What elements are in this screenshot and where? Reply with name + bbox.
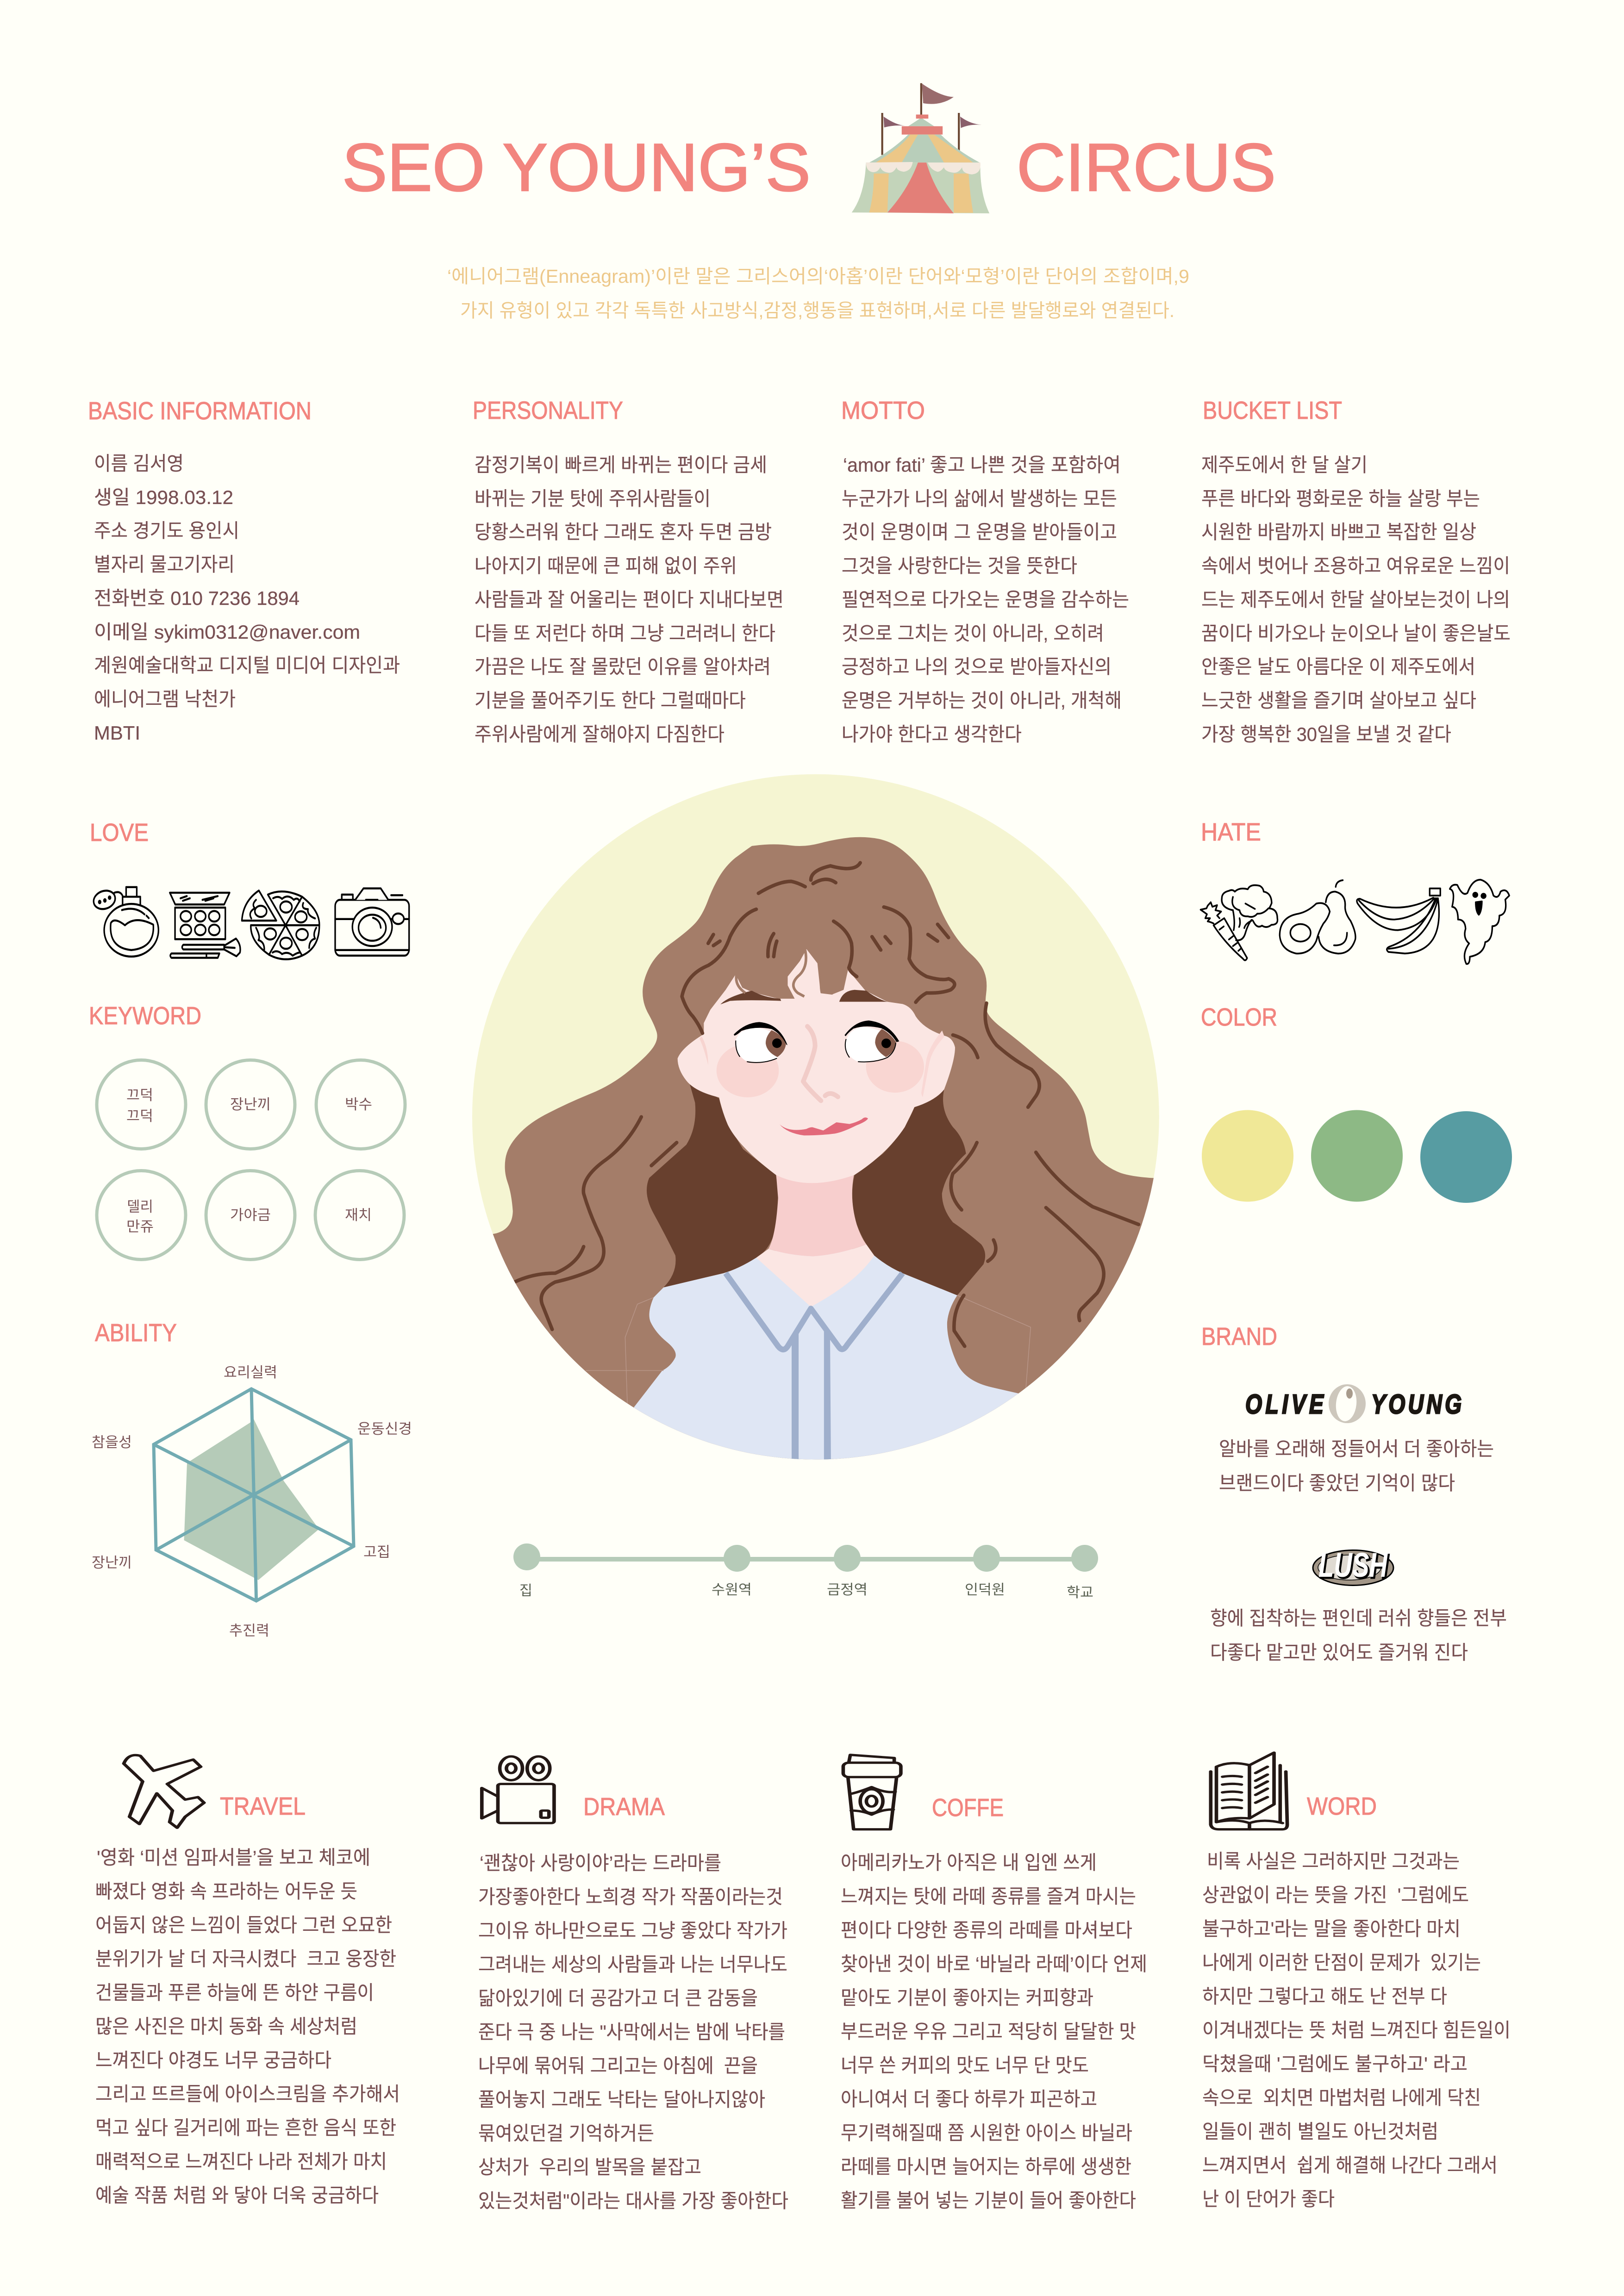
mouth: [780, 1118, 868, 1135]
text block: 라떼를 마시면 늘어지는 하루에 생생한: [841, 2156, 1131, 2178]
keyword circle: 만쥬: [126, 1219, 154, 1235]
text block: 드는 제주도에서 한달 살아보는것이 나의: [1201, 589, 1510, 610]
panel: ability: [92, 1319, 412, 1639]
keyword circle: 가야금: [230, 1207, 271, 1223]
color swatch: [1311, 1110, 1403, 1201]
text block: 그이유 하나만으로도 그냥 좋았다 작가가: [478, 1920, 787, 1941]
text block: 이메일 sykim0312@naver.com: [94, 621, 360, 643]
text block: [95, 1847, 400, 2206]
radar chart: 요리실력: [224, 1364, 277, 1381]
fringe shadows: [720, 990, 887, 1004]
text block: 찾아낸 것이 바로 ‘바닐라 라떼’이다 언제: [841, 1953, 1147, 1975]
radar chart: [92, 1364, 412, 1639]
title: SEO YOUNG’S: [342, 130, 811, 205]
heading: LOVE: [90, 819, 149, 846]
keyword circle: [315, 1171, 404, 1260]
hair strands: [736, 950, 833, 996]
title: CIRCUS: [1017, 130, 1276, 205]
text block: '영화 ‘미션 임파서블’을 보고 체코에: [97, 1847, 370, 1868]
text block: 맡아도 기분이 좋아지는 커피향과: [841, 1987, 1093, 2009]
panel: commute timeline: 집: [519, 1583, 532, 1599]
keyword circle: 박수: [345, 1096, 372, 1113]
keyword circle: 장난끼: [230, 1096, 271, 1113]
text block: lush: 향에 집착하는 편인데 러쉬 향들은 전부: [1210, 1607, 1507, 1629]
cheek: [717, 1044, 779, 1097]
panel: bucket list: [1201, 397, 1511, 745]
shirt: [634, 1249, 1018, 1460]
panel: hate: [1200, 818, 1509, 964]
dark hair: [647, 1083, 778, 1288]
text block: 그것을 사랑한다는 것을 뜻한다: [842, 555, 1077, 577]
text block: 것으로 그치는 것이 아니라, 오히려: [842, 622, 1104, 644]
panel: travel: [95, 1755, 400, 2206]
text block: 그리고 뜨르들에 아이스크림을 추가해서: [95, 2083, 400, 2105]
logo: lush: LUSH: [1318, 1546, 1388, 1584]
panel: brand: [1201, 1323, 1507, 1663]
text block: 가장 행복한 30일을 보낼 것 같다: [1201, 723, 1451, 745]
text block: lush: [1210, 1607, 1507, 1663]
radar chart: 고집: [363, 1544, 390, 1560]
text block: 일들이 괜히 별일도 아닌것처럼: [1202, 2121, 1438, 2142]
logo: olive young: [1245, 1384, 1462, 1423]
panel: personality: [473, 397, 784, 745]
panel: basic information: [88, 397, 400, 744]
radar chart: 참을성: [92, 1434, 132, 1450]
icon: airplane: [124, 1755, 204, 1828]
keyword circle: [316, 1060, 405, 1149]
heading: ABILITY: [95, 1319, 177, 1347]
text block: 부드러운 우유 그리고 적당히 달달한 맛: [841, 2021, 1136, 2042]
keyword circle: 재치: [345, 1207, 372, 1223]
text block: 별자리 물고기자리: [94, 554, 235, 575]
keyword circle: [97, 1171, 186, 1260]
nose: [803, 1027, 838, 1101]
text block: 나무에 묶어둬 그리고는 아침에 끈을: [478, 2055, 758, 2077]
keyword circle: 끄덕: [126, 1108, 153, 1124]
radar chart: 운동신경: [357, 1421, 412, 1437]
panel: word: [1202, 1753, 1511, 2210]
text block: 속으로 외치면 마법처럼 나에게 닥친: [1202, 2087, 1481, 2109]
text block: 주소 경기도 용인시: [94, 520, 239, 541]
text block: 나에게 이러한 단점이 문제가 있기는: [1202, 1952, 1481, 1973]
heading: BRAND: [1201, 1323, 1277, 1350]
text block: 주위사람에게 잘해야지 다짐한다: [475, 723, 725, 745]
text block: 누군가가 나의 삶에서 발생하는 모든: [842, 488, 1117, 510]
logo: olive young: OLIVE: [1245, 1389, 1324, 1419]
panel: commute timeline: 수원역: [712, 1582, 752, 1598]
panel: commute timeline: 금정역: [827, 1582, 868, 1598]
panel: commute timeline: [513, 1543, 1098, 1600]
icon: bananas: [1357, 889, 1440, 953]
faint hair seams: [586, 1295, 1031, 1404]
icon: pizza: [242, 890, 319, 959]
cheek shading: [921, 1031, 944, 1097]
text block: [1201, 454, 1511, 745]
text block: 예술 작품 처럼 와 닿아 더욱 궁금하다: [95, 2184, 379, 2206]
icon: ghost: [1450, 880, 1509, 964]
text block: 다들 또 저런다 하며 그냥 그러려니 한다: [475, 622, 775, 644]
text block: 분위기가 날 더 자극시켰다 크고 웅장한: [95, 1948, 396, 1970]
text block: 가끔은 나도 잘 몰랐던 이유를 알아차려: [475, 656, 771, 678]
icon: avocado and pear: [1280, 880, 1355, 953]
heading: BUCKET LIST: [1203, 397, 1342, 424]
icons: love row: [93, 887, 409, 959]
text block: 제주도에서 한 달 살기: [1201, 454, 1368, 476]
text block: ‘amor fati’ 좋고 나쁜 것을 포함하여: [843, 454, 1121, 476]
facial features: [717, 1020, 944, 1135]
text block: 시원한 바람까지 바쁘고 복잡한 일상: [1201, 521, 1476, 543]
text block: 기분을 풀어주기도 한다 그럴때마다: [475, 690, 746, 711]
icon: eyeshadow palette: [170, 893, 240, 958]
panel: coffee: [841, 1755, 1147, 2211]
text block: 속에서 벗어나 조용하고 여유로운 느낌이: [1201, 555, 1510, 577]
text block: 무기력해질때 쯤 시원한 아이스 바닐라: [841, 2122, 1132, 2144]
heading: BASIC INFORMATION: [88, 397, 312, 425]
text block: 안좋은 날도 아름다운 이 제주도에서: [1201, 656, 1475, 678]
text block: 그려내는 세상의 사람들과 나는 너무나도: [478, 1954, 787, 1975]
keyword circle: 끄덕: [126, 1087, 153, 1103]
text block: 닥쳤을때 '그럼에도 불구하고' 라고: [1202, 2053, 1468, 2075]
panel: keyword: [89, 1002, 405, 1260]
color swatch: [1202, 1110, 1293, 1201]
subtitle text block: 가지 유형이 있고 각각 독특한 사고방식,감정,행동을 표현하며,서로 다른 발달행로와 연결된다.: [460, 300, 1174, 321]
text block: olive young: 브랜드이다 좋았던 기억이 많다: [1219, 1472, 1455, 1494]
logo: lush: LUSH: [1320, 1547, 1389, 1586]
text block: 이겨내겠다는 뜻 처럼 느껴진다 힘든일이: [1202, 2019, 1511, 2041]
text block: [475, 454, 784, 745]
text block: 있는것처럼"이라는 대사를 가장 좋아한다: [478, 2190, 788, 2212]
text block: 매력적으로 느껴진다 나라 전체가 마치: [95, 2151, 387, 2172]
heading: TRAVEL: [220, 1792, 306, 1820]
cheek: [866, 1041, 924, 1093]
text block: 불구하고'라는 말을 좋아한다 마치: [1202, 1918, 1461, 1940]
text block: 전화번호 010 7236 1894: [94, 587, 300, 609]
text block: 느껴지면서 쉽게 해결해 나간다 그래서: [1202, 2154, 1498, 2176]
heading: WORD: [1307, 1792, 1377, 1820]
text block: 느껴진다 야경도 너무 궁금하다: [95, 2049, 331, 2071]
panel: color: [1201, 1003, 1512, 1203]
icon: camera: [335, 889, 409, 956]
panel: drama: [478, 1756, 788, 2212]
text block: 빠졌다 영화 속 프라하는 어두운 듯: [95, 1880, 357, 1902]
panel: commute timeline: 인덕원: [965, 1582, 1005, 1598]
text block: 풀어놓지 그래도 낙타는 달아나지않아: [478, 2089, 765, 2110]
subtitle text block: [447, 266, 1189, 321]
heading: COFFE: [932, 1794, 1004, 1822]
text block: ‘괜찮아 사랑이야’라는 드라마를: [480, 1852, 721, 1874]
text block: 아니여서 더 좋다 하루가 피곤하고: [841, 2088, 1097, 2110]
keyword circle: [206, 1060, 295, 1149]
panel: motto: [841, 397, 1129, 745]
text block: [841, 1852, 1147, 2211]
text block: 난 이 단어가 좋다: [1202, 2188, 1335, 2210]
text block: 사람들과 잘 어울리는 편이다 지내다보면: [475, 589, 784, 610]
title: [342, 130, 1276, 205]
text block: 상처가 우리의 발목을 붙잡고: [478, 2156, 701, 2178]
icon: circus tent: [852, 83, 989, 213]
text block: 느긋한 생활을 즐기며 살아보고 싶다: [1201, 690, 1476, 711]
text block: 것이 운명이며 그 운명을 받아들이고: [842, 521, 1117, 543]
icon: coffee cup: [843, 1755, 901, 1829]
portrait illustration: [472, 774, 1159, 1460]
text block: [1202, 1850, 1511, 2210]
text block: [94, 453, 400, 744]
text block: 편이다 다양한 종류의 라떼를 마셔보다: [841, 1919, 1132, 1941]
panel: commute timeline: 학교: [1067, 1585, 1093, 1600]
heading: MOTTO: [841, 397, 925, 424]
text block: 준다 극 중 나는 "사막에서는 밤에 낙타를: [478, 2021, 785, 2043]
text block: lush: 다좋다 맡고만 있어도 즐거워 진다: [1210, 1642, 1468, 1663]
text block: 이름 김서영: [94, 453, 184, 474]
text block: 에니어그램 낙천가: [94, 688, 236, 710]
text block: MBTI: [94, 722, 140, 744]
left eye: [734, 1022, 787, 1063]
text block: 하지만 그렇다고 해도 난 전부 다: [1202, 1985, 1447, 2007]
icon: open book: [1211, 1753, 1287, 1829]
icon: movie camera: [482, 1756, 554, 1823]
keyword circle: 델리: [127, 1199, 153, 1215]
logo: olive young: YOUNG: [1371, 1389, 1462, 1419]
heading: COLOR: [1201, 1003, 1277, 1031]
heading: HATE: [1201, 818, 1261, 846]
keyword circle: [206, 1171, 295, 1260]
text block: 상관없이 라는 뜻을 가진 '그럼에도: [1202, 1884, 1469, 1906]
text block: 묶여있던걸 기억하거든: [478, 2122, 654, 2144]
text block: 먹고 싶다 길거리에 파는 흔한 음식 또한: [95, 2117, 396, 2139]
radar chart: 추진력: [229, 1623, 269, 1639]
right eye: [844, 1020, 899, 1062]
text block: 당황스러워 한다 그래도 혼자 두면 금방: [475, 521, 772, 543]
heading: DRAMA: [583, 1793, 665, 1821]
panel: love: [90, 819, 409, 959]
text block: 아메리카노가 아직은 내 입엔 쓰게: [841, 1852, 1097, 1873]
placket: [792, 1330, 831, 1463]
text block: 필연적으로 다가오는 운명을 감수하는: [842, 589, 1129, 610]
text block: 푸른 바다와 평화로운 하늘 살랑 부는: [1201, 488, 1480, 510]
hair back: [493, 837, 1154, 1460]
keyword circle: [97, 1060, 186, 1149]
icon: perfume: [93, 887, 158, 957]
face shading: [700, 1036, 708, 1065]
icon: carrot and broccoli: [1200, 885, 1278, 960]
heading: KEYWORD: [89, 1002, 201, 1030]
radar chart: 장난끼: [92, 1555, 132, 1571]
text block: 긍정하고 나의 것으로 받아들자신의: [842, 656, 1112, 678]
text block: [842, 454, 1129, 745]
text block: 어둡지 않은 느낌이 들었다 그런 오묘한: [95, 1914, 392, 1936]
text block: olive young: 알바를 오래해 정들어서 더 좋아하는: [1219, 1438, 1494, 1460]
text block: 활기를 불어 넣는 기분이 들어 좋아한다: [841, 2190, 1136, 2211]
text block: 계원예술대학교 디지털 미디어 디자인과: [94, 654, 400, 676]
text block: 바뀌는 기분 탓에 주위사람들이: [475, 488, 711, 510]
icons: hate row: [1200, 880, 1509, 964]
collar: [725, 1273, 903, 1350]
text block: 너무 쓴 커피의 맛도 너무 단 맛도: [841, 2054, 1089, 2076]
text block: 건물들과 푸른 하늘에 뜬 하얀 구름이: [95, 1982, 374, 2004]
text block: 운명은 거부하는 것이 아니라, 개척해: [842, 690, 1122, 711]
chest skin: [756, 1244, 874, 1307]
text block: 많은 사진은 마치 동화 속 세상처럼: [95, 2016, 357, 2037]
hair lines: [758, 863, 860, 893]
text block: 느껴지는 탓에 라떼 종류를 즐겨 마시는: [841, 1885, 1136, 1907]
text block: olive young: [1219, 1438, 1494, 1494]
neck: [768, 1171, 866, 1257]
text block: 가장좋아한다 노희경 작가 작품이라는것: [478, 1886, 783, 1908]
subtitle text block: ‘에니어그램(Enneagram)’이란 말은 그리스어의‘아홉’이란 단어와‘모형’이란 단어의 조합이며,9: [447, 266, 1189, 287]
color swatch: [1420, 1111, 1512, 1203]
text block: 꿈이다 비가오나 눈이오나 날이 좋은날도: [1201, 622, 1511, 644]
heading: PERSONALITY: [473, 397, 623, 424]
text block: [478, 1852, 788, 2212]
text block: 감정기복이 빠르게 바뀌는 편이다 금세: [475, 454, 767, 476]
text block: 생일 1998.03.12: [94, 486, 233, 508]
text block: 나아지기 때문에 큰 피해 없이 주위: [475, 555, 737, 577]
face: [678, 949, 955, 1183]
text block: 나가야 한다고 생각한다: [842, 723, 1022, 745]
text block: 비록 사실은 그러하지만 그것과는: [1207, 1850, 1460, 1872]
text block: 닮아있기에 더 공감가고 더 큰 감동을: [478, 1987, 758, 2009]
